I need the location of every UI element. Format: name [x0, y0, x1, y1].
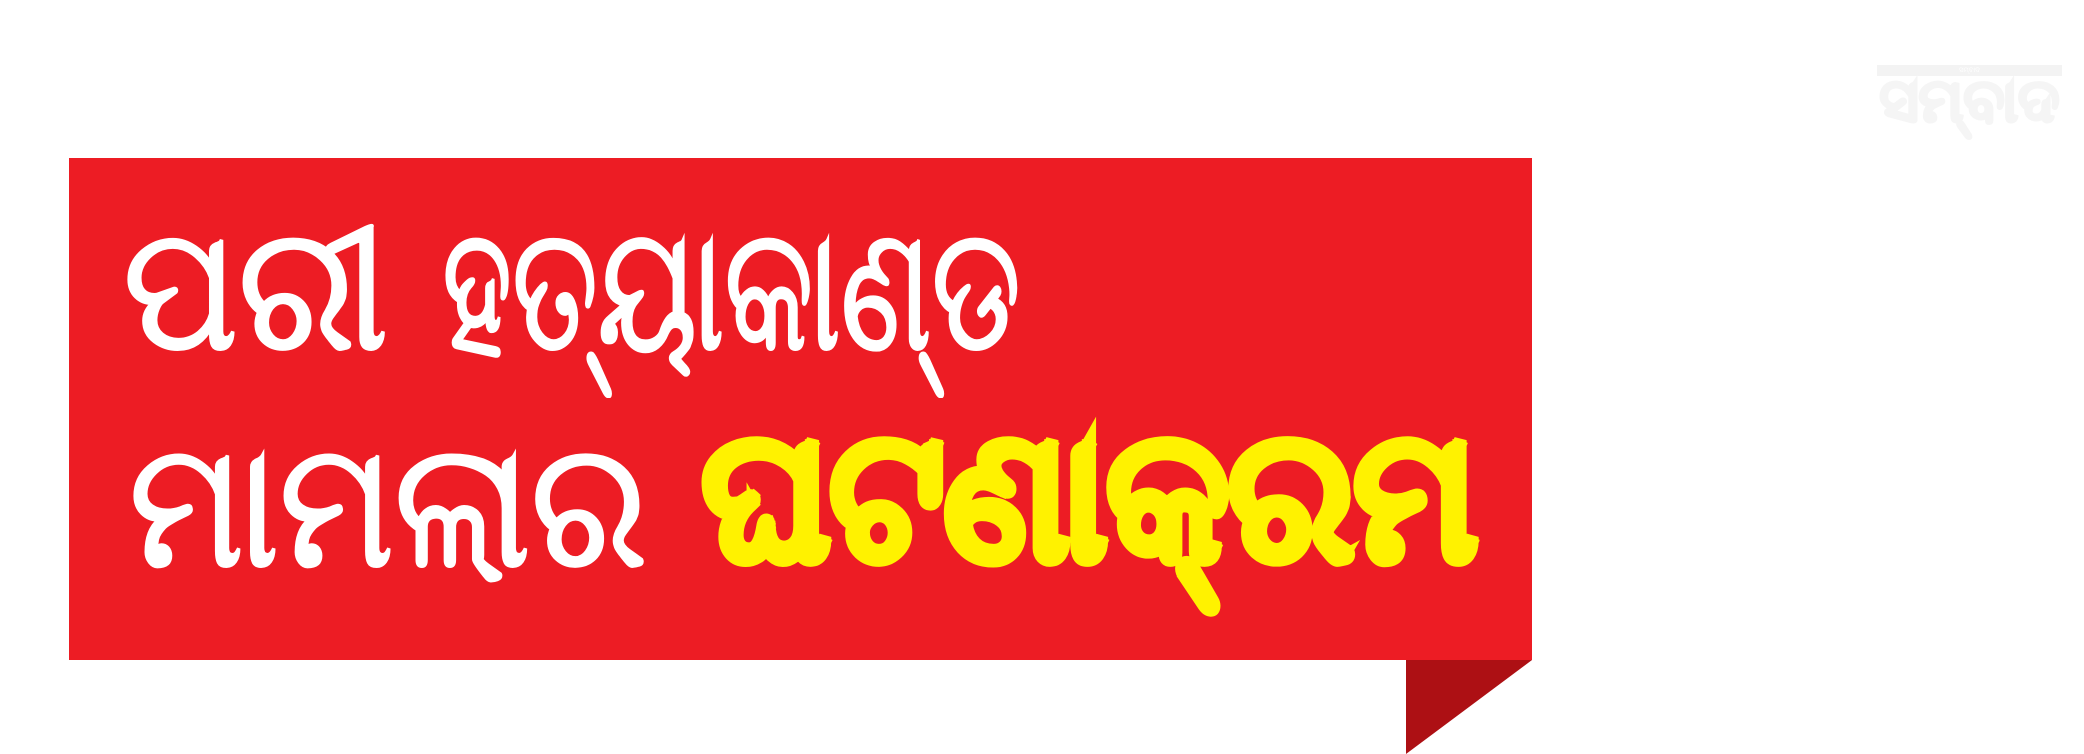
logo watermark: ସମ୍ବାଦ: [1880, 67, 2059, 134]
heading: line one first word: ପରୀ: [123, 192, 388, 386]
icon: ribbon fold: [1406, 660, 1532, 754]
logo watermark: ସମ୍ବାଦ: [1959, 67, 1980, 74]
heading: line one second word: ହତ୍ୟାକାଣ୍ଡ: [442, 192, 1021, 386]
heading: line two yellow highlight: ଘଟଣାକ୍ରମ: [702, 394, 1477, 598]
heading: line two white: ମାମଲାର: [129, 409, 647, 604]
panel: red ribbon banner: [69, 158, 1532, 660]
